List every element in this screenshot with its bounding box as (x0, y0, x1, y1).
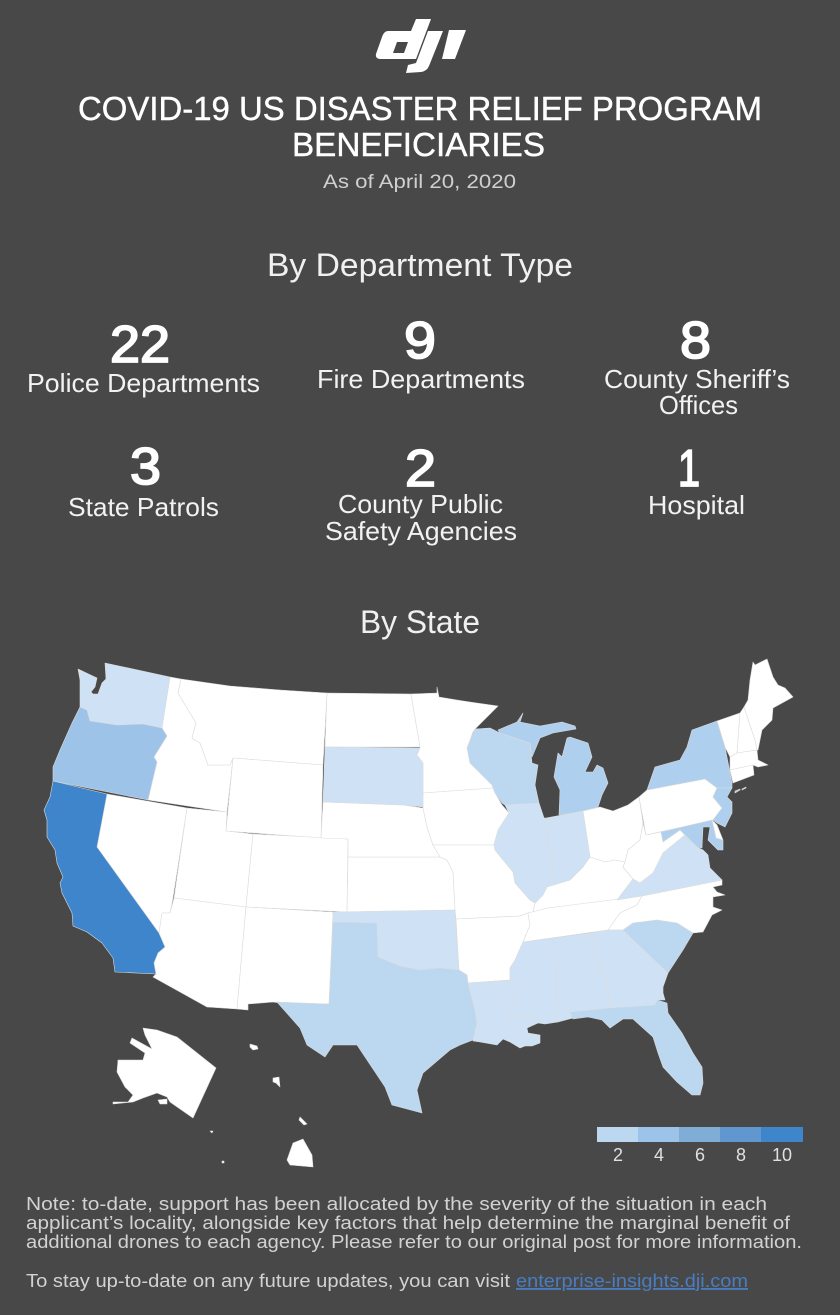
stat: state patrols: 3 (130, 438, 161, 496)
stat: county sheriff's offices: Offices (659, 390, 738, 420)
subtitle: date: As of April 20, 2020 (323, 172, 516, 193)
legend: state count scale: 4 (654, 1145, 664, 1165)
update note with link text: To stay up-to-date on any future updates, you can visit (26, 1270, 510, 1291)
stat: police departments (27, 316, 260, 398)
stat: hospital: 1 (678, 440, 700, 498)
legend: state count scale: 2 (613, 1145, 623, 1165)
heading: by state: By State (360, 604, 480, 640)
stat: county sheriff's offices (604, 312, 790, 420)
stat: police departments: 22 (110, 316, 170, 374)
stat: fire departments: Fire Departments (317, 364, 525, 394)
map: US states choropleth (44, 659, 793, 1167)
stat: county sheriff's offices: County Sheriff’s (604, 364, 790, 394)
stat: county sheriff's offices: 8 (680, 312, 711, 370)
stat: fire departments (317, 312, 525, 394)
stat: county public safety agencies: County Public (338, 489, 503, 519)
footnote: Note: to-date, support has been allocated by the severity of the situation in each (26, 1193, 767, 1214)
stat: hospital (648, 440, 745, 520)
stat: hospital: Hospital (648, 490, 745, 520)
footnote: additional drones to each agency. Please refer to our original post for more information. (26, 1231, 802, 1252)
legend: state count scale: 10 (772, 1145, 792, 1165)
title (78, 91, 762, 164)
update note with link text (26, 1270, 748, 1291)
footnote (26, 1193, 802, 1252)
legend: state count scale: 6 (695, 1145, 705, 1165)
logo: dji (376, 19, 466, 73)
footnote: applicant’s locality, alongside key factors that help determine the marginal benefit of (26, 1212, 791, 1233)
stat: county public safety agencies: 2 (405, 440, 436, 498)
title: COVID-19 US DISASTER RELIEF PROGRAM (78, 91, 762, 128)
stat: state patrols (68, 438, 219, 522)
title: BENEFICIARIES (292, 127, 545, 164)
legend: state count scale (597, 1127, 803, 1165)
stat: state patrols: State Patrols (68, 492, 219, 522)
stat: police departments: Police Departments (27, 368, 260, 398)
stat: county public safety agencies (325, 440, 517, 546)
stat: fire departments: 9 (404, 312, 436, 370)
stat: county public safety agencies: Safety Agencies (325, 516, 517, 546)
legend: state count scale: 8 (736, 1145, 746, 1165)
update note with link text: enterprise-insights.dji.com (516, 1270, 748, 1291)
heading: by department type: By Department Type (267, 247, 573, 283)
